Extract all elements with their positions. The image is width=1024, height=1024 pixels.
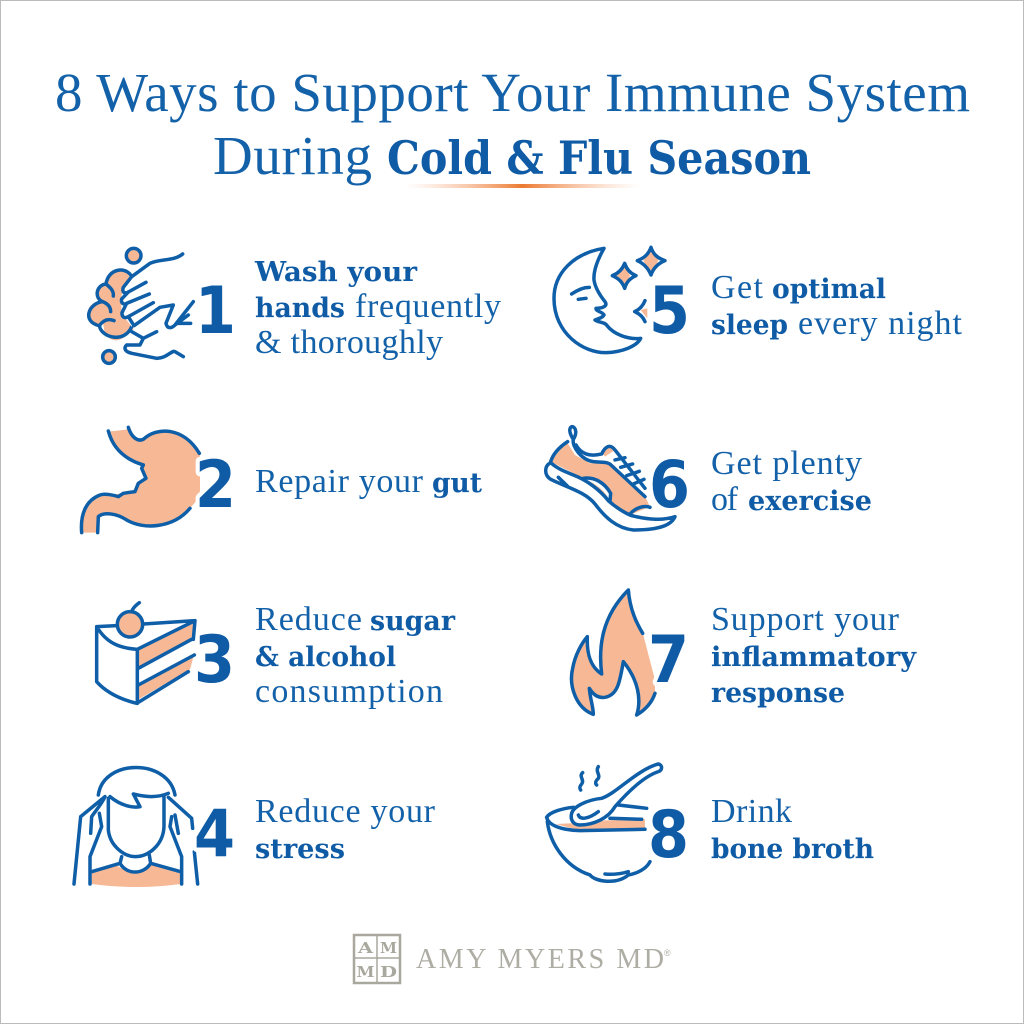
item 1: wash hands bbox=[88, 248, 501, 363]
text 6: Get plenty bbox=[711, 445, 862, 482]
text 7: response bbox=[711, 678, 845, 709]
logo wordmark: AMY MYERS MD bbox=[416, 944, 664, 975]
text 4 bbox=[255, 793, 436, 865]
icon: stressed person bbox=[74, 767, 198, 887]
text 3 bbox=[255, 601, 456, 710]
logo mark: M bbox=[356, 963, 374, 981]
text 8 bbox=[711, 793, 874, 865]
text 6 bbox=[711, 445, 872, 518]
icon: cake slice bbox=[97, 603, 195, 703]
text 3: & alcohol bbox=[255, 642, 396, 673]
logo bbox=[354, 935, 671, 983]
text 5: every night bbox=[798, 305, 963, 342]
logo mark: A bbox=[357, 939, 373, 957]
number 6: 6 bbox=[649, 448, 690, 523]
logo mark bbox=[354, 935, 400, 983]
text 7 bbox=[711, 601, 917, 709]
text 8: Drink bbox=[711, 793, 792, 830]
title: Cold & Flu Season bbox=[387, 131, 811, 185]
icon: running shoe bbox=[546, 427, 675, 530]
text 5 bbox=[711, 269, 963, 342]
title: During bbox=[213, 125, 372, 186]
text 5: optimal bbox=[772, 274, 886, 305]
number 7: 7 bbox=[648, 623, 689, 698]
text 1 bbox=[254, 257, 501, 361]
icon: flame bbox=[572, 590, 655, 715]
text 1: & thoroughly bbox=[255, 324, 443, 361]
text 1: frequently bbox=[355, 288, 501, 325]
title bbox=[55, 62, 970, 186]
number 5: 5 bbox=[649, 274, 690, 349]
number 8: 8 bbox=[648, 798, 689, 873]
item 8: bone broth bbox=[547, 764, 874, 881]
number 1: 1 bbox=[195, 274, 236, 349]
text 1: Wash your bbox=[254, 257, 418, 288]
text 8: bone broth bbox=[711, 834, 874, 865]
text 3: sugar bbox=[370, 606, 456, 637]
item 6: exercise bbox=[546, 427, 872, 530]
icon: stomach bbox=[81, 427, 200, 533]
title: 8 Ways to Support Your Immune System bbox=[55, 62, 970, 123]
text 1: hands bbox=[255, 293, 345, 324]
icon: bowl and spoon bbox=[547, 764, 662, 881]
registered mark: ® bbox=[664, 948, 671, 958]
text 4: stress bbox=[255, 834, 345, 865]
text 5: sleep bbox=[711, 310, 788, 341]
item 7: inflammatory response bbox=[572, 590, 917, 715]
number 4: 4 bbox=[194, 797, 235, 872]
text 3: Reduce bbox=[255, 601, 362, 638]
text 2: gut bbox=[432, 468, 483, 499]
number 3: 3 bbox=[194, 623, 235, 698]
logo mark: D bbox=[380, 963, 397, 981]
text 3: consumption bbox=[255, 673, 443, 710]
logo mark: M bbox=[380, 939, 397, 957]
text 7: Support your bbox=[711, 601, 900, 638]
icon: moon and stars bbox=[554, 247, 665, 353]
item 2: repair gut bbox=[81, 427, 483, 533]
text 6: exercise bbox=[748, 486, 872, 517]
text 7: inflammatory bbox=[711, 642, 917, 673]
item 3: reduce sugar bbox=[97, 601, 456, 710]
item 4: reduce stress bbox=[74, 767, 436, 887]
text 4: Reduce your bbox=[255, 793, 436, 830]
item 5: optimal sleep bbox=[554, 247, 963, 353]
number 2: 2 bbox=[195, 448, 236, 523]
title underline bbox=[405, 184, 640, 188]
text 2: Repair your bbox=[255, 463, 424, 500]
text 6: of bbox=[711, 481, 739, 518]
text 5: Get bbox=[711, 269, 764, 306]
icon: washing hands bbox=[88, 248, 193, 363]
